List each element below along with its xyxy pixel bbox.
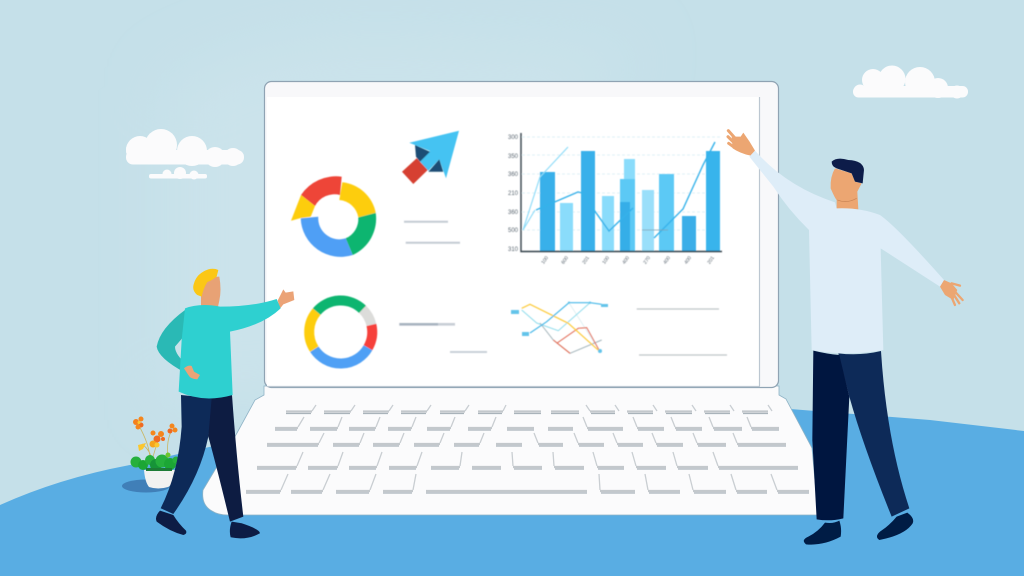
x axis labels: 400	[683, 255, 693, 266]
y axis labels: 300	[508, 135, 519, 141]
x axis labels: 400	[621, 255, 631, 266]
ground hill	[0, 409, 1024, 576]
person: right legs	[804, 351, 913, 545]
text lines: bottom donut	[399, 324, 487, 352]
donut chart: bottom left	[309, 301, 372, 364]
screen display	[267, 97, 759, 386]
trousers back leg	[161, 395, 215, 514]
trousers front leg	[208, 395, 243, 522]
laptop	[203, 82, 818, 515]
lowered hand	[940, 280, 963, 305]
flowers	[133, 416, 178, 451]
x axis labels: 100	[540, 255, 550, 266]
x axis labels	[540, 255, 716, 266]
flower stems	[138, 424, 172, 460]
hair	[193, 269, 218, 297]
donut chart: top left	[291, 176, 376, 257]
pot	[144, 470, 175, 488]
x axis labels: 400	[662, 255, 672, 266]
y axis labels: 360	[508, 210, 519, 216]
face and neck	[831, 168, 862, 209]
bar chart	[508, 133, 722, 266]
text lines: top donut	[404, 222, 460, 243]
trend lines	[523, 147, 568, 230]
cloud: small left	[149, 167, 207, 180]
left head neck	[201, 277, 220, 307]
x axis labels: 201	[581, 255, 591, 266]
y axis labels: 360	[508, 172, 519, 178]
person: left	[156, 269, 294, 538]
keyboard keys	[246, 405, 809, 493]
front leg	[838, 351, 909, 517]
text lines: line chart	[637, 309, 727, 355]
plant shadow	[122, 480, 170, 492]
torso and arm	[179, 299, 281, 398]
leaves	[130, 452, 180, 471]
y axis labels	[508, 135, 519, 253]
x axis labels: 201	[706, 255, 716, 266]
hair	[832, 159, 864, 183]
icon: arrow	[402, 131, 459, 184]
person: right upper body	[728, 131, 963, 353]
cloud: upper right	[853, 66, 968, 98]
plant	[122, 416, 180, 492]
keyboard base	[203, 386, 818, 515]
dashboard on screen	[291, 131, 727, 364]
y axis labels: 350	[508, 154, 519, 160]
y axis labels: 500	[508, 228, 519, 234]
y axis labels: 210	[508, 191, 519, 197]
x axis labels: 600	[560, 255, 570, 266]
back leg	[812, 351, 849, 520]
shoes	[804, 521, 841, 545]
cloud: upper left	[126, 129, 244, 167]
left hand raised	[278, 289, 294, 309]
bars	[540, 151, 720, 251]
raised hand	[728, 131, 755, 156]
hand on hip	[184, 366, 200, 379]
back arm	[157, 310, 188, 373]
x axis labels: 100	[601, 255, 611, 266]
x axis labels: 270	[642, 255, 652, 266]
sweater	[749, 151, 944, 353]
shoes	[156, 511, 186, 535]
screen lid	[264, 82, 778, 388]
y axis labels: 310	[508, 247, 519, 253]
line chart	[511, 302, 608, 353]
axes	[521, 133, 722, 252]
